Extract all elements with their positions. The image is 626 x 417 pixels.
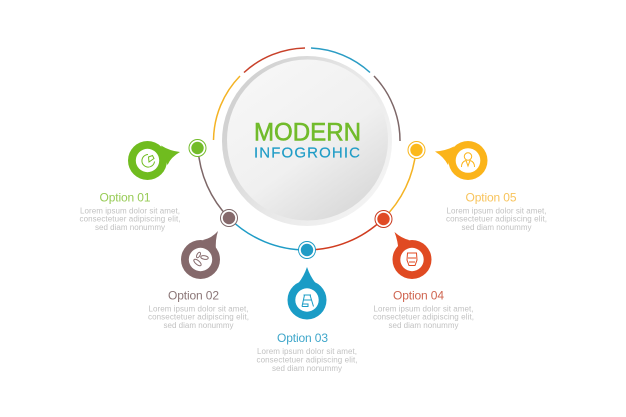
node: red (375, 210, 392, 228)
text: option 04: Option 04 (393, 288, 444, 302)
text: option 04: consectetuer adipiscing elit, (373, 312, 474, 322)
text: option 01 (80, 190, 180, 232)
text: option 05: Lorem ipsum dolor sit amet, (446, 206, 546, 216)
text: option 03: Lorem ipsum dolor sit amet, (257, 347, 357, 356)
icon: leaves (193, 252, 209, 267)
icon: bucket (407, 253, 417, 266)
text: option 03: consectetuer adipiscing elit, (256, 356, 358, 364)
node: brown (220, 210, 238, 226)
pin: option 03 blue (288, 267, 326, 320)
title: MODERN (254, 118, 361, 146)
node: green (189, 140, 206, 156)
central disc (222, 56, 392, 226)
icon: ladder (302, 295, 314, 306)
node: yellow (408, 142, 425, 158)
pin: option 04 red (392, 232, 432, 279)
lower ring arcs (198, 148, 416, 250)
text: option 01: consectetuer adipiscing elit, (80, 214, 180, 224)
text: option 01: Option 01 (100, 190, 151, 204)
pin: option 05 yellow (435, 141, 488, 180)
icon: pie chart (142, 154, 154, 167)
text: option 04: Lorem ipsum dolor sit amet, (374, 304, 474, 314)
text: option 01: sed diam nonummy (95, 223, 165, 232)
text: option 05 (446, 190, 547, 232)
text: option 02: consectetuer adipiscing elit, (148, 312, 249, 322)
icon: person (462, 153, 474, 167)
text: option 01: Lorem ipsum dolor sit amet, (80, 206, 180, 216)
text: option 04 (373, 288, 474, 330)
pin: option 02 brown (181, 231, 220, 279)
upper ring arcs (214, 48, 400, 141)
text: option 03: sed diam nonummy (272, 364, 342, 373)
text: option 02: Lorem ipsum dolor sit amet, (148, 304, 248, 314)
pin: option 01 green (128, 141, 180, 180)
text: option 04: sed diam nonummy (388, 321, 458, 330)
text: option 03 (256, 331, 358, 373)
text: option 05: consectetuer adipiscing elit, (446, 214, 547, 224)
title (254, 118, 361, 161)
node: blue (298, 242, 316, 258)
text: option 02 (148, 288, 249, 330)
title: INFOGROHIC (254, 144, 360, 161)
text: option 02: Option 02 (168, 288, 219, 302)
text: option 02: sed diam nonummy (164, 321, 234, 330)
text: option 05: Option 05 (466, 190, 517, 204)
text: option 05: sed diam nonummy (462, 223, 532, 232)
text: option 03: Option 03 (277, 331, 328, 345)
